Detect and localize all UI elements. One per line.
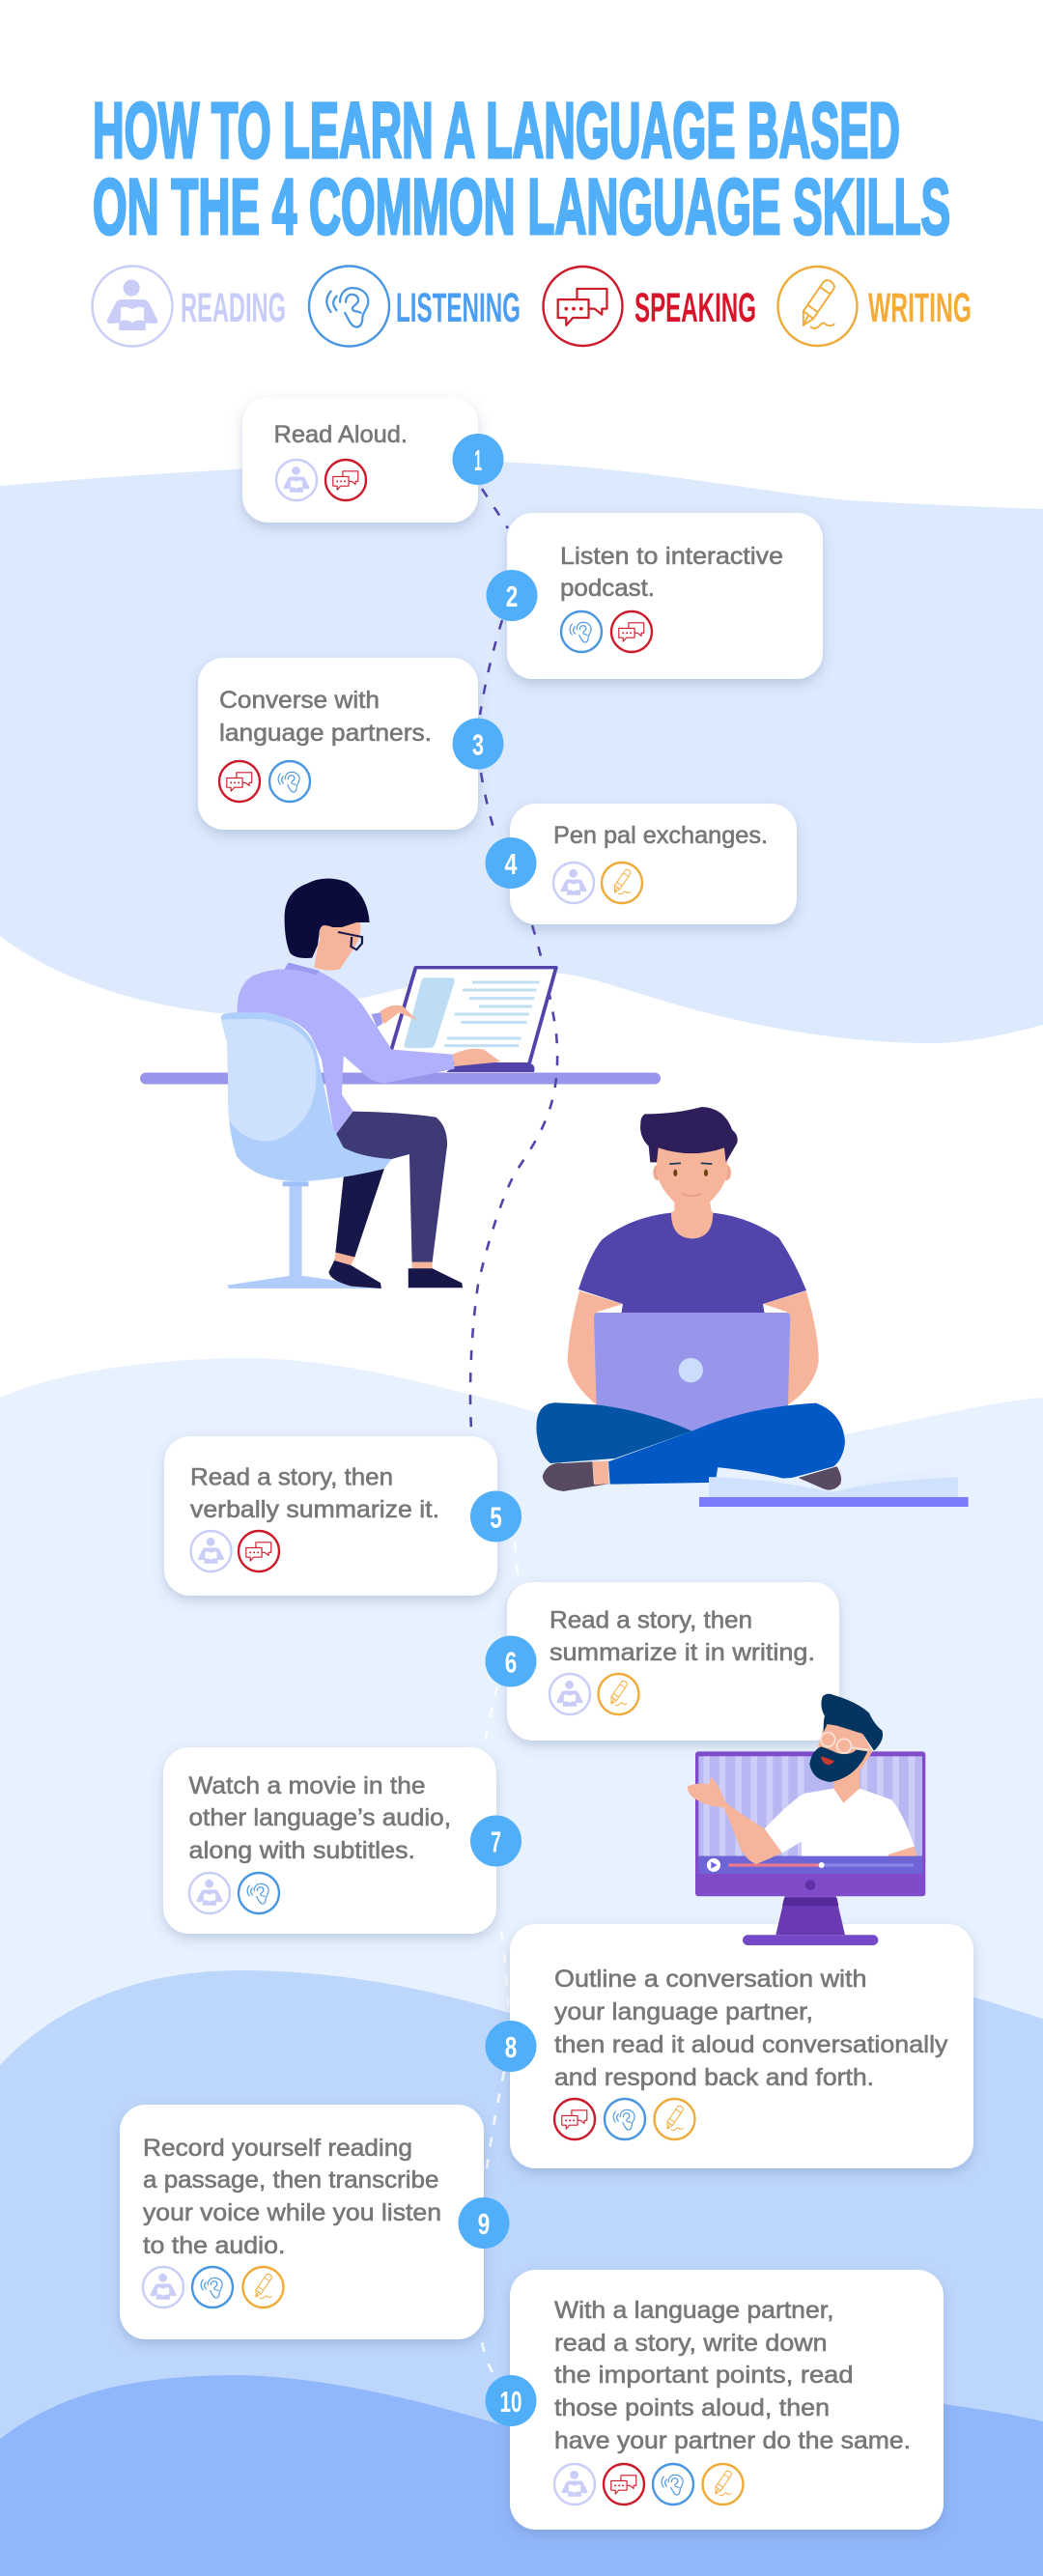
card 6 text: summarize it in writing. [550, 1639, 815, 1666]
card 7 icon: reading [189, 1873, 230, 1913]
card 1 text: Read Aloud. [274, 421, 408, 448]
card 3 text: Converse with [219, 687, 380, 714]
right ear [722, 1165, 731, 1180]
hair [640, 1107, 738, 1162]
neck and face [314, 922, 360, 971]
card 8 icon: listening [605, 2099, 645, 2139]
card 4 icon: reading [553, 863, 594, 903]
step number 3 [452, 719, 504, 769]
card 9 text: to the audio. [143, 2232, 286, 2259]
head [657, 1146, 727, 1206]
card 10 icon: reading [554, 2464, 595, 2505]
glasses [338, 932, 362, 949]
step number 2: 2 [506, 580, 518, 613]
illustration: desk top [140, 1072, 661, 1084]
step number 7: 7 [491, 1826, 501, 1858]
legend item: reading [93, 267, 286, 346]
left leg [536, 1402, 692, 1463]
card 6 text [550, 1607, 815, 1666]
monitor frame [695, 1751, 925, 1896]
card 9 text: your voice while you listen [143, 2199, 441, 2226]
card 10 text: have your partner do the same. [554, 2427, 911, 2454]
collar [285, 963, 320, 975]
card 10 text [554, 2297, 911, 2454]
step number 9: 9 [478, 2207, 490, 2241]
ears [653, 1165, 662, 1180]
presenter neck [833, 1768, 860, 1803]
card 5 text: verbally summarize it. [190, 1496, 439, 1523]
illustration: presenter on desktop monitor [688, 1694, 925, 1945]
card 5 icon: reading [191, 1531, 232, 1571]
card 5 [164, 1436, 497, 1596]
step number 1 [452, 434, 504, 485]
card 7 text: along with subtitles. [189, 1837, 415, 1864]
legend item: listening: LISTENING [396, 285, 521, 331]
card 10 icon: speaking [604, 2464, 644, 2505]
card 3 icon: listening [269, 761, 310, 802]
legend item: reading: READING [181, 285, 286, 331]
card 6 text: Read a story, then [550, 1607, 752, 1634]
card 8 icon: writing [655, 2099, 695, 2139]
step number 10 [485, 2375, 537, 2426]
dashed path: white segments steps 5 to 10 [482, 1543, 519, 2376]
card 8 text: your language partner, [554, 1998, 813, 2025]
background: deep blue wave [0, 2375, 1043, 2576]
card 7 text [189, 1772, 451, 1864]
card 2 text [560, 543, 783, 602]
card 8 text: and respond back and forth. [554, 2064, 874, 2091]
step number 6: 6 [505, 1646, 517, 1679]
step number 9 [458, 2197, 510, 2249]
laptop [594, 1313, 790, 1432]
legend: four language skills [93, 267, 972, 346]
card 6 [507, 1582, 839, 1741]
legend item: speaking: SPEAKING [634, 285, 756, 331]
card 7 text: Watch a movie in the [189, 1772, 425, 1799]
monitor stand [743, 1896, 878, 1945]
monitor screen with stripes [698, 1756, 922, 1856]
presenter arm and hand [688, 1777, 916, 1864]
card 10 icon: writing [703, 2464, 744, 2505]
step number 8: 8 [505, 2030, 517, 2064]
presenter hair [821, 1694, 883, 1751]
background: mid blue wave [0, 1970, 1043, 2576]
chair base [227, 1181, 381, 1288]
card 2 icon: speaking [611, 611, 652, 652]
step number 8 [485, 2021, 537, 2072]
title [93, 87, 950, 251]
background: top light blue wave [0, 462, 1043, 1043]
card 5 text [190, 1464, 439, 1523]
near hand [453, 1049, 500, 1066]
step number 4: 4 [504, 847, 518, 881]
card 10 text: those points aloud, then [554, 2394, 830, 2421]
step number 7 [470, 1816, 522, 1866]
card 1 [242, 397, 478, 523]
card 9 text [143, 2135, 441, 2259]
t-shirt [578, 1213, 806, 1314]
laptop screen [391, 968, 556, 1064]
legend item: writing [778, 267, 972, 346]
card 10 text: the important points, read [554, 2362, 854, 2389]
card 8 icon: speaking [554, 2099, 595, 2139]
shoes [328, 1260, 463, 1288]
card 8 text [554, 1966, 948, 2091]
background: pale blue wave [0, 1358, 1043, 2576]
open book [699, 1467, 969, 1507]
card 5 text: Read a story, then [190, 1464, 393, 1491]
card 8 text: Outline a conversation with [554, 1966, 867, 1993]
card 10 text: With a language partner, [554, 2297, 834, 2324]
shirt [238, 963, 455, 1137]
card 2 text: podcast. [560, 575, 655, 602]
ankles [334, 1253, 433, 1268]
card 9 text: Record yourself reading [143, 2135, 412, 2162]
dashed path: steps 1 to 4 and down to step 5 [470, 489, 557, 1430]
ankle [592, 1461, 609, 1485]
step number 5 [470, 1491, 522, 1542]
card 1 icon: reading [276, 460, 317, 500]
step number 1: 1 [474, 443, 482, 477]
card 1 icon: speaking [325, 460, 366, 500]
illustration: person at desk with laptop [221, 879, 556, 1288]
legend item: speaking [543, 267, 756, 346]
chair back and seat [221, 1012, 392, 1181]
step number 2 [487, 570, 537, 621]
presenter glasses [821, 1733, 869, 1753]
webcam dot [805, 1880, 815, 1890]
far hand [377, 1005, 417, 1024]
card 4 [510, 804, 797, 924]
card 10 [510, 2270, 944, 2530]
card 10 icon: listening [653, 2464, 693, 2505]
card 9 icon: listening [192, 2267, 233, 2307]
right leg [608, 1403, 845, 1485]
card 9 [120, 2105, 484, 2339]
card 9 icon: writing [243, 2267, 284, 2307]
illustration: man sitting cross-legged with laptop and book [536, 1107, 969, 1507]
sleeve cuff [371, 1012, 382, 1027]
step number 4 [485, 837, 537, 889]
card 6 icon: writing [599, 1674, 639, 1714]
neck [671, 1201, 713, 1238]
ear [320, 925, 329, 944]
step number 10: 10 [500, 2385, 522, 2419]
presenter mouth [821, 1756, 834, 1765]
card 8 [510, 1924, 973, 2168]
card 4 text: Pen pal exchanges. [553, 822, 768, 849]
card 7 text: other language’s audio, [189, 1804, 451, 1831]
presenter face [818, 1721, 872, 1777]
shoes [543, 1461, 841, 1491]
card 8 text: then read it aloud conversationally [554, 2031, 948, 2058]
laptop base [447, 1064, 535, 1072]
far leg [335, 1169, 384, 1258]
presenter beard [809, 1746, 867, 1782]
card 7 icon: listening [239, 1873, 279, 1913]
card 9 text: a passage, then transcribe [143, 2166, 438, 2194]
arms [568, 1291, 819, 1405]
video control bar [698, 1856, 922, 1874]
hair [285, 879, 370, 958]
card 3 icon: speaking [219, 761, 260, 802]
step number 3: 3 [472, 728, 484, 761]
card 4 icon: writing [602, 863, 642, 903]
step number 5: 5 [490, 1501, 502, 1534]
card 6 icon: reading [550, 1674, 590, 1714]
face details [669, 1163, 712, 1196]
card 3 text: language partners. [219, 720, 432, 747]
presenter shirt [765, 1789, 915, 1856]
card 9 icon: reading [143, 2267, 183, 2307]
legend item: writing: WRITING [868, 285, 972, 331]
legend item: listening [309, 267, 521, 346]
step number 6 [485, 1636, 537, 1686]
near leg [334, 1112, 447, 1262]
card 5 icon: speaking [239, 1531, 279, 1571]
card 2 icon: listening [561, 611, 602, 652]
card 3 [198, 658, 478, 830]
card 2 text: Listen to interactive [560, 543, 783, 570]
card 3 text [219, 687, 432, 747]
card 2 [507, 513, 823, 679]
card 7 [163, 1747, 496, 1934]
card 10 text: read a story, write down [554, 2330, 827, 2357]
